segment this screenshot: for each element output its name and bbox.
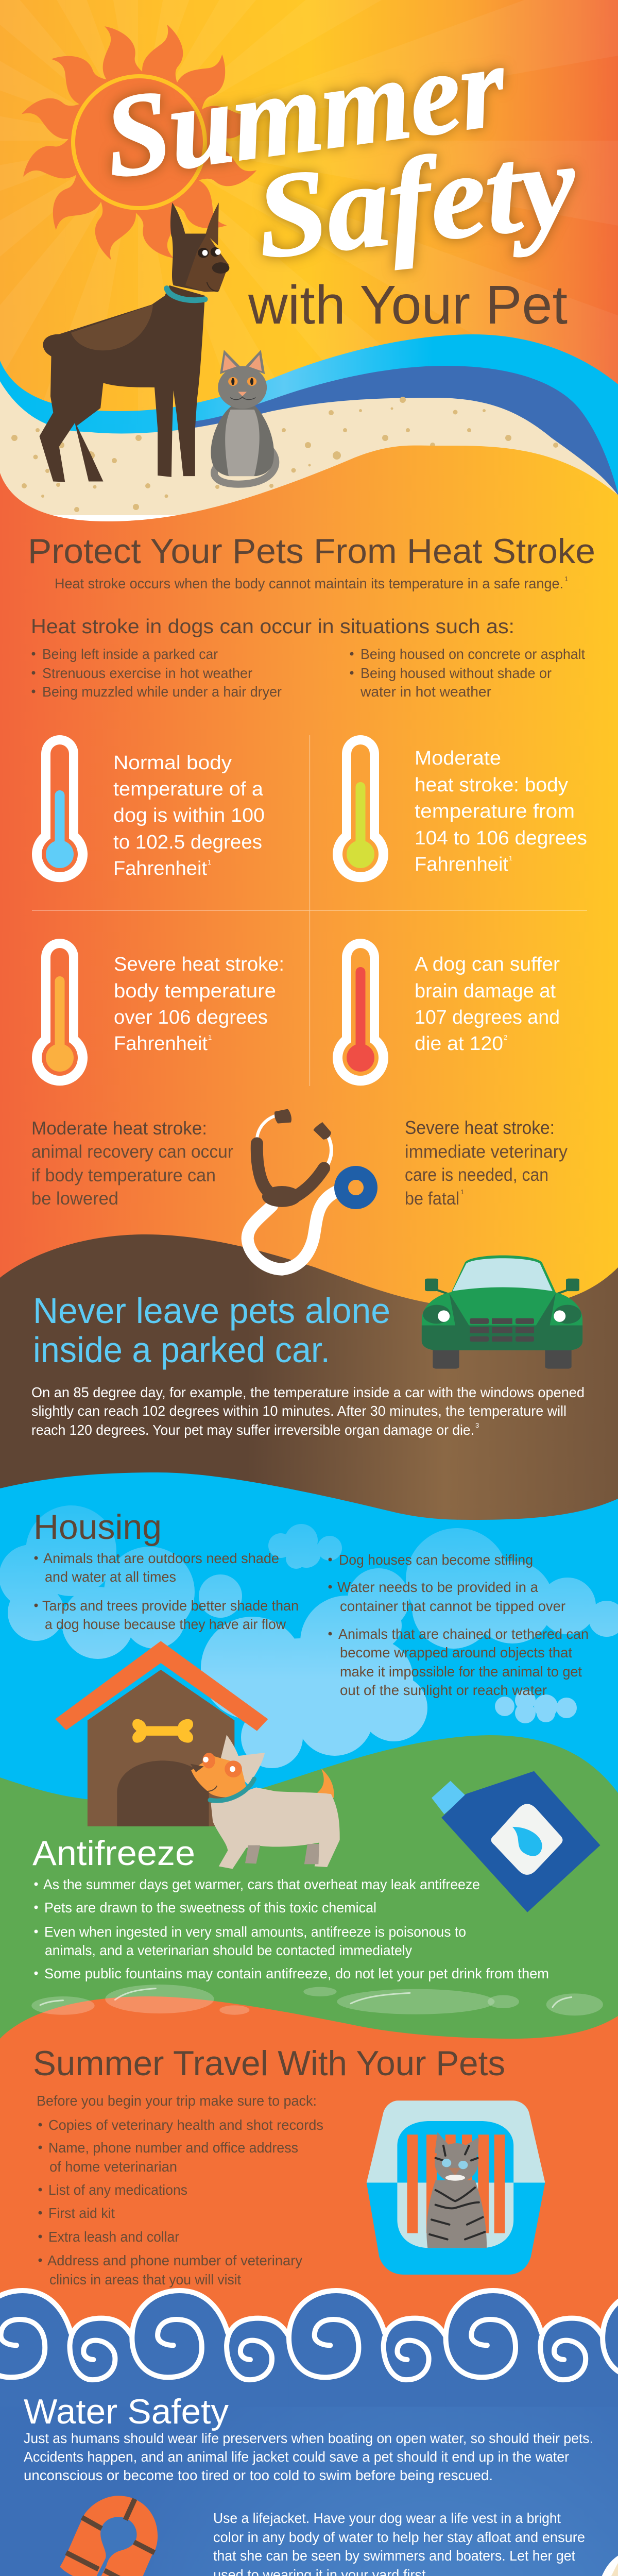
stat text: moderate heat stroke [415,748,587,875]
stat text: normal temperature: temperature of a [113,778,264,800]
orange background [0,1996,618,2421]
packing list: Name, phone number and office address [48,2140,298,2156]
paragraph: use a lifejacket: color in any body of water to help her stay afloat and ensure [213,2529,585,2545]
packing list: of home veterinarian [49,2159,177,2175]
bullet list: housing right [329,1552,589,1698]
bullet list: housing left [34,1550,299,1632]
stat text: moderate heat stroke: Fahrenheit [415,854,508,875]
bullet list: housing left: and water at all times [45,1569,176,1585]
bullet list: antifreeze: animals, and a veterinarian should be contacted immediately [45,1942,412,1958]
heading: summer travel: Summer Travel With Your Pets [33,2044,505,2083]
packing list: Copies of veterinary health and shot records [48,2117,323,2133]
stat text: severe heat stroke [114,954,284,1055]
packing list: Extra leash and collar [48,2229,179,2245]
illustration: dog house [55,1641,268,1826]
brown hill background [0,1234,618,1525]
packing list: Address and phone number of veterinary [47,2252,302,2268]
panel: housing [0,1472,618,1855]
icon: thermometer amber [32,939,88,1086]
paragraph: life preservers [24,2430,593,2483]
stat text: brain damage [415,954,560,1055]
stat text: normal temperature: Fahrenheit [113,858,207,879]
bullet list: left: Being left inside a parked car [42,646,218,662]
bullet list: housing right: container that cannot be tipped over [340,1598,565,1614]
bullet list: left: Being muzzled while under a hair dryer [42,684,282,700]
stat text: severe heat stroke: 1 [208,1033,212,1041]
paragraph: car temperature: On an 85 degree day, for example, the temperature inside a car with the windows opened [31,1384,585,1400]
paragraph: use a lifejacket: Use a lifejacket. Have your dog wear a life vest in a bright [213,2510,561,2526]
heading: never leave pets alone: inside a parked car. [33,1330,330,1370]
paragraph: use a lifejacket: that she can be seen by swimmers and boaters. Let her get [213,2548,575,2564]
illustration: grey cat [211,350,276,484]
paragraph: use a lifejacket [213,2510,585,2576]
text: severe outcome: be fatal [405,1189,459,1209]
icon: stethoscope [248,1109,371,1269]
subtitle: with your pet: with Your Pet [248,275,568,335]
bullet list: right [350,646,585,700]
stat text: brain damage: brain damage at [415,980,556,1002]
bullet list: left: Strenuous exercise in hot weather [42,665,252,681]
panel: parked car [0,1109,618,1525]
packing list: List of any medications [48,2182,187,2198]
paragraph: car temperature: reach 120 degrees. Your pet may suffer irreversible organ damage or die. [31,1422,474,1438]
packing list: First aid kit [48,2205,115,2221]
text: moderate outcome: be lowered [31,1189,118,1209]
text: moderate outcome: if body temperature can [31,1165,216,1185]
orange gradient background [0,446,618,1391]
illustration: pet carrier with cat [367,2100,545,2275]
stat text: moderate heat stroke: heat stroke: body [415,774,568,796]
panel: heat stroke [0,446,618,1391]
text: severe outcome: 1 [460,1188,464,1196]
stat text: normal temperature: to 102.5 degrees [113,832,262,853]
wave bands and sand [0,334,618,515]
header sunburst background [0,0,618,411]
title: Summer Safety [97,20,582,284]
packing list [37,2093,323,2287]
puddles [31,1985,603,2015]
water background [0,2380,618,2576]
bullet list: antifreeze: Even when ingested in very small amounts, antifreeze is poisonous to [44,1924,466,1940]
text: severe outcome: immediate veterinary [405,1142,568,1162]
bullet list: housing right: Dog houses can become stifling [339,1552,533,1568]
stat text: brain damage: die at 120 [415,1033,503,1055]
bullet list: antifreeze: Pets are drawn to the sweetness of this toxic chemical [44,1900,376,1916]
text: moderate outcome [31,1117,233,1209]
subheading: situations: Heat stroke in dogs can occur in situations such as: [31,616,514,638]
paragraph: car temperature: 3 [475,1421,479,1429]
heading: never leave pets alone [33,1291,390,1370]
packing list: Before you begin your trip make sure to pack: [37,2093,317,2109]
intro sentence: 1 [564,575,568,583]
stat text: moderate heat stroke: 104 to 106 degrees [415,827,587,849]
panel: antifreeze [0,1641,618,2061]
stat text: severe heat stroke: Fahrenheit [114,1033,208,1055]
paragraph: car temperature: slightly can reach 102 degrees within 10 minutes. After 30 minutes, the temperature will [31,1403,566,1419]
intro sentence: Heat stroke occurs when the body cannot maintain its temperature in a safe range. [55,575,563,591]
stat text: brain damage: 2 [504,1033,507,1041]
paragraph: life preservers: unconscious or become too tired or too cold to swim before being rescued. [24,2467,493,2483]
sky background [0,1472,618,1855]
title: Summer Safety: Summer [97,20,514,203]
stat text: normal temperature: 1 [208,858,211,866]
scrolling waves border [0,2291,618,2407]
heading: antifreeze: Antifreeze [32,1834,195,1873]
bullet list: housing right: Water needs to be provided in a [337,1579,538,1595]
title: Summer Safety: Safety [250,117,582,284]
stat text: moderate heat stroke: Moderate [415,748,501,769]
illustration: doberman dog [40,202,229,482]
icon: thermometer blue [32,735,88,882]
text: moderate outcome: Moderate heat stroke: [31,1117,207,1139]
clouds [0,1505,618,1768]
icon: thermometer green [333,735,388,882]
bullet list: housing left: Tarps and trees provide better shade than [42,1598,299,1614]
stat text: normal temperature: Normal body [113,752,232,774]
paragraph: life preservers: Accidents happen, and an animal life jacket could save a pet should it end up in the water [24,2449,569,2465]
text: moderate outcome: animal recovery can occur [31,1142,233,1162]
stat text: brain damage: 107 degrees and [415,1007,560,1028]
bullet list: right: Being housed on concrete or asphalt [360,646,585,662]
bullet list: left [32,646,282,700]
icon: life jacket [60,2496,158,2576]
heading: protect your pets: Protect Your Pets From Heat Stroke [28,532,595,571]
green hill background [0,1735,618,2061]
stat text: brain damage: A dog can suffer [415,954,560,975]
bullet list: antifreeze: Some public fountains may contain antifreeze, do not let your pet drink from them [44,1965,549,1981]
packing list: clinics in areas that you will visit [49,2272,241,2287]
stat text: moderate heat stroke: temperature from [415,801,575,822]
icon: thermometer red [333,939,388,1086]
bullet list: housing right: become wrapped around objects that [340,1645,572,1660]
stat text: normal temperature: dog is within 100 [113,805,265,826]
text: severe outcome: Severe heat stroke: [405,1117,555,1138]
stat text: severe heat stroke: body temperature [114,980,276,1002]
stat text: severe heat stroke: over 106 degrees [114,1007,268,1028]
bullet list: housing left: Animals that are outdoors need shade [43,1550,279,1566]
paragraph: life preservers: Just as humans should wear life preservers when boating on open water, so should their pets. [24,2430,593,2446]
bullet list: right: Being housed without shade or [360,665,552,681]
bullet list: housing right: out of the sunlight or reach water [340,1682,547,1698]
heading: housing: Housing [33,1507,162,1547]
stat text: normal temperature [113,752,265,879]
icon: green car [422,1256,582,1369]
heading: water safety: Water Safety [24,2392,229,2431]
stat text: severe heat stroke: Severe heat stroke: [114,954,284,975]
panel: header [0,0,618,515]
stat text: moderate heat stroke: 1 [509,854,512,862]
bullet list: antifreeze: As the summer days get warmer, cars that overheat may leak antifreeze [43,1876,480,1892]
icon: sun [18,21,260,263]
text: severe outcome: care is needed, can [405,1165,548,1185]
bullet list: housing left: a dog house because they have air flow [45,1616,286,1632]
bullet list: right: water in hot weather [360,684,491,700]
bullet list: housing right: Animals that are chained or tethered can [338,1626,589,1642]
panel: water safety [0,2291,618,2576]
panel: summer travel [0,1985,618,2421]
paragraph: car temperature [31,1384,585,1438]
bullet list: antifreeze [34,1876,549,1981]
illustration: beach shoreline [517,2555,618,2576]
bullet list: housing right: make it impossible for the animal to get [340,1664,582,1680]
icon: antifreeze jug [432,1771,600,1912]
text: severe outcome [405,1117,568,1209]
illustration: small dog [191,1735,340,1869]
heading: never leave pets alone: Never leave pets alone [33,1291,390,1331]
